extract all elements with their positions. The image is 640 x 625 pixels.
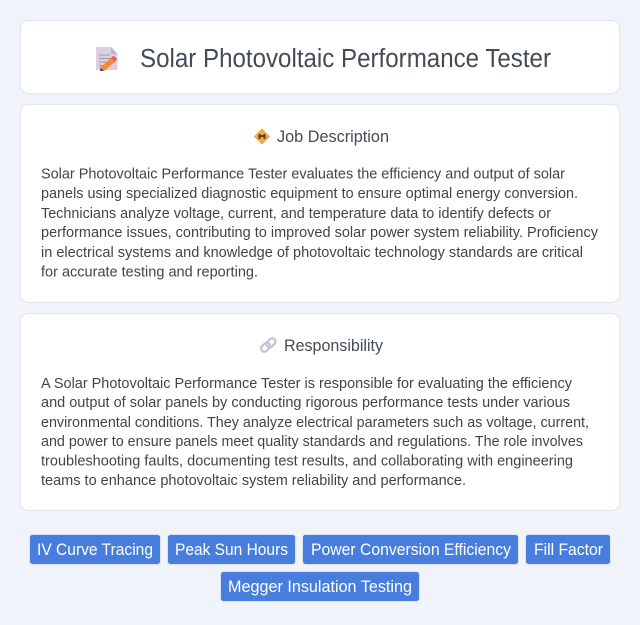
text: job description body: panels using specialized diagnostic equipment to ensure optimal energy conversion. [41, 186, 578, 202]
icon: construction diamond [254, 128, 270, 144]
text: job description body: Solar Photovoltaic Performance Tester evaluates the efficiency and output of solar [41, 166, 565, 182]
heading: job description: Job Description [277, 128, 389, 146]
title: Solar Photovoltaic Performance Tester [140, 45, 551, 73]
tag: Fill Factor [526, 534, 610, 564]
tag: Power Conversion Efficiency [302, 534, 518, 564]
text: job description body [41, 166, 599, 280]
panel: title header [20, 20, 620, 94]
tag: Peak Sun Hours: Peak Sun Hours [175, 541, 288, 559]
icon: link [260, 337, 277, 353]
text: responsibility body: and power to ensure panels meet quality standards and regulations. The role involves [41, 434, 583, 450]
icon: document with pencil [96, 47, 118, 71]
heading: responsibility: Responsibility [284, 337, 384, 355]
tag: Megger Insulation Testing [220, 572, 420, 602]
panel: job description [20, 104, 620, 302]
text: responsibility body: troubleshooting faults, documenting test results, and collaborating with engineering [41, 454, 573, 470]
text: job description body: performance issues, contributing to improved solar power system reliability. Proficiency [41, 225, 599, 241]
tags row [30, 534, 610, 602]
text: responsibility body: environmental conditions. They analyze electrical parameters such as voltage, current, [41, 415, 589, 431]
tag: Megger Insulation Testing: Megger Insulation Testing [228, 578, 412, 596]
tag: IV Curve Tracing [30, 534, 160, 564]
text: job description body: for accurate testing and reporting. [41, 264, 258, 280]
tag: Peak Sun Hours [168, 534, 296, 564]
text: responsibility body: teams to enhance photovoltaic system reliability and performance. [41, 473, 466, 489]
text: job description body: Technicians analyze voltage, current, and temperature data to identify defects or [41, 206, 551, 222]
tag: IV Curve Tracing: IV Curve Tracing [37, 541, 153, 559]
text: job description body: in electrical systems and knowledge of photovoltaic technology standards are critical [41, 245, 583, 261]
text: responsibility body: and output of solar panels by conducting rigorous performance tests under various [41, 395, 570, 411]
tag: Power Conversion Efficiency: Power Conversion Efficiency [311, 541, 512, 559]
panel: responsibility [20, 314, 620, 510]
text: responsibility body [41, 376, 589, 489]
tag: Fill Factor: Fill Factor [534, 541, 603, 559]
text: responsibility body: A Solar Photovoltaic Performance Tester is responsible for evaluating the efficiency [41, 376, 573, 392]
